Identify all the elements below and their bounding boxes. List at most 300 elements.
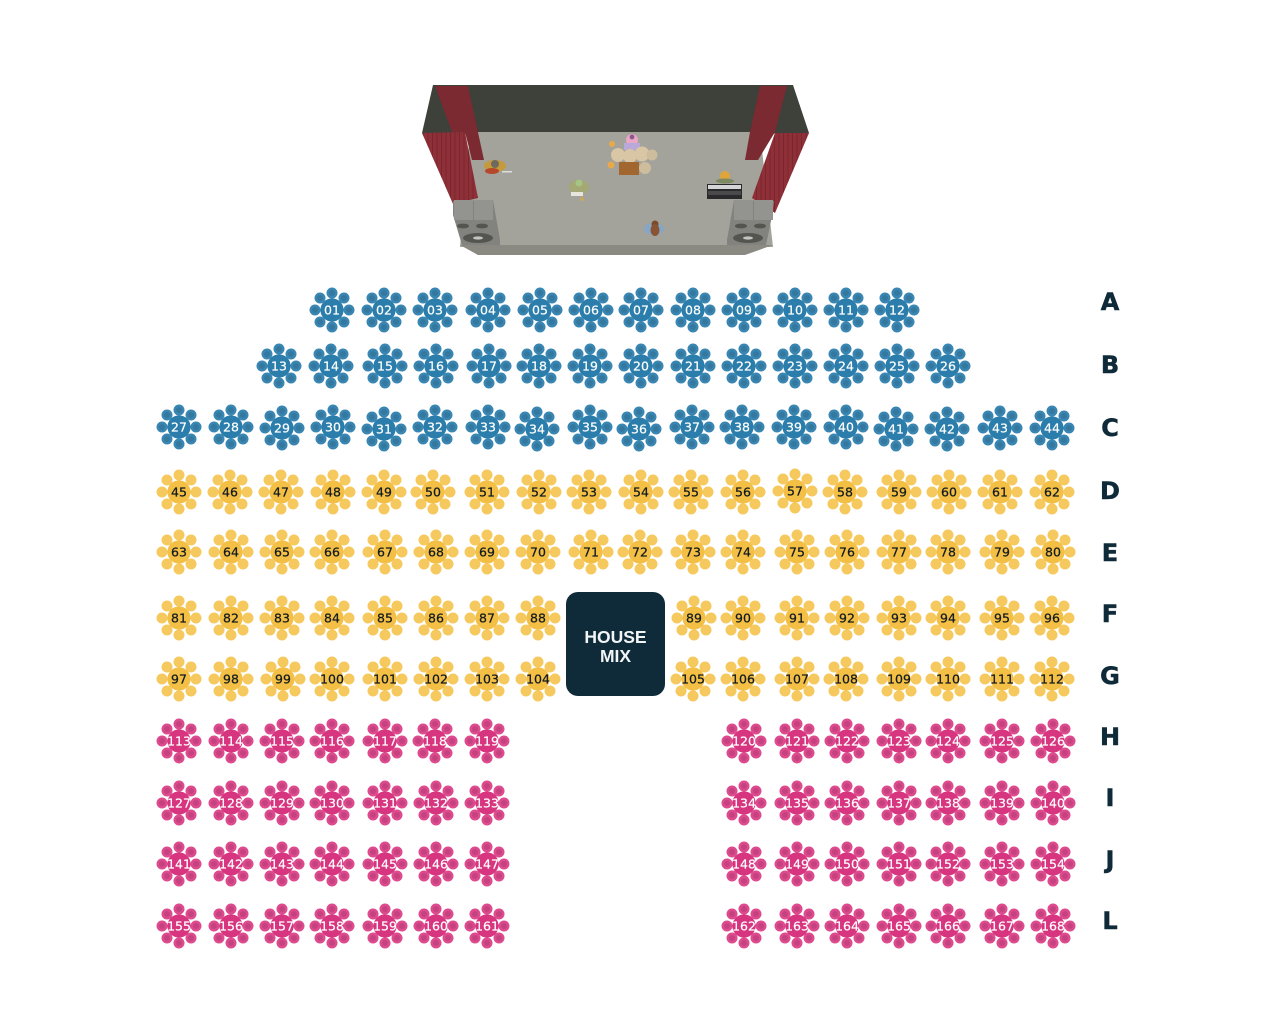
table 73: 73 <box>685 544 701 560</box>
table 47: 47 <box>273 484 289 500</box>
table 41: 41 <box>888 422 904 436</box>
table 160: 160 <box>424 918 448 934</box>
row letter F: F <box>1102 600 1118 628</box>
table 161: 161 <box>475 918 499 934</box>
table 45: 45 <box>171 484 187 500</box>
row G tables <box>156 656 1074 702</box>
table 68: 68 <box>428 544 444 560</box>
table 15: 15 <box>377 358 393 374</box>
table 70 <box>516 530 560 574</box>
table 26 <box>926 344 970 388</box>
table 121: 121 <box>785 734 809 748</box>
table 67 <box>362 530 408 574</box>
table 52 <box>516 470 562 514</box>
table 51: 51 <box>479 484 495 500</box>
right speakers <box>727 200 774 245</box>
table 101 <box>362 656 408 702</box>
table 140 <box>1030 780 1076 826</box>
table 26: 26 <box>940 358 956 374</box>
table 128 <box>208 780 254 826</box>
table 168: 168 <box>1041 918 1065 934</box>
table 21 <box>670 344 716 388</box>
table 82 <box>208 596 254 640</box>
table 153: 153 <box>990 856 1014 872</box>
table 121 <box>774 718 820 764</box>
table 159 <box>362 904 408 948</box>
table 01: 01 <box>324 302 340 318</box>
table 42: 42 <box>939 422 955 436</box>
table 144 <box>310 842 354 886</box>
table 116: 116 <box>320 734 344 748</box>
table 151 <box>876 842 922 886</box>
table 33 <box>466 404 510 450</box>
table 23: 23 <box>787 358 803 374</box>
table 143 <box>260 842 304 886</box>
table 126 <box>1030 718 1076 764</box>
table 94: 94 <box>940 610 956 626</box>
table 91 <box>774 596 820 640</box>
table 77: 77 <box>891 544 907 560</box>
table 17 <box>466 344 512 388</box>
table 30: 30 <box>325 420 341 434</box>
table 128: 128 <box>219 796 243 810</box>
table 67: 67 <box>377 544 393 560</box>
table 79: 79 <box>994 544 1010 560</box>
table 35 <box>568 404 612 450</box>
table 16 <box>414 344 458 388</box>
table 42 <box>924 406 970 452</box>
table 136 <box>824 780 870 826</box>
table 46 <box>208 470 252 514</box>
table 143: 143 <box>270 856 294 872</box>
table 50: 50 <box>425 484 441 500</box>
table 156: 156 <box>219 918 243 934</box>
table 31: 31 <box>376 422 392 436</box>
table 136: 136 <box>835 796 859 810</box>
table 151: 151 <box>887 856 911 872</box>
table 167: 167 <box>990 918 1014 934</box>
table 132 <box>414 780 458 826</box>
table 71: 71 <box>583 544 599 560</box>
table 75 <box>774 530 820 574</box>
table 63: 63 <box>171 544 187 560</box>
table 96: 96 <box>1044 610 1060 626</box>
table 135: 135 <box>785 796 809 810</box>
table 148: 148 <box>732 856 756 872</box>
table 05: 05 <box>532 302 548 318</box>
table 09 <box>722 288 766 332</box>
table 77 <box>876 530 922 574</box>
table 127: 127 <box>167 796 191 810</box>
table 06 <box>568 288 614 332</box>
table 03: 03 <box>427 302 443 318</box>
table 147 <box>464 842 510 886</box>
table 61: 61 <box>992 484 1008 500</box>
table 98: 98 <box>223 672 239 686</box>
table 72 <box>618 530 662 574</box>
table 118: 118 <box>423 734 447 748</box>
table 127 <box>156 780 202 826</box>
table 114: 114 <box>219 734 243 748</box>
keyboard player <box>707 171 742 199</box>
row letters <box>1100 288 1120 935</box>
table 57 <box>772 468 818 514</box>
table 25 <box>874 344 920 388</box>
table 152: 152 <box>936 856 960 872</box>
table 60 <box>926 470 972 514</box>
drum kit <box>608 134 658 175</box>
table 142: 142 <box>219 856 243 872</box>
table 36 <box>616 406 662 452</box>
table 159: 159 <box>373 918 397 934</box>
table 68 <box>414 530 458 574</box>
table 111: 111 <box>990 672 1014 686</box>
table 15 <box>362 344 408 388</box>
table 25: 25 <box>889 358 905 374</box>
table 92 <box>824 596 870 640</box>
table 158: 158 <box>320 918 344 934</box>
table 131 <box>362 780 408 826</box>
table 88 <box>516 596 560 640</box>
table 110 <box>926 656 970 702</box>
table 59: 59 <box>891 484 907 500</box>
table 123: 123 <box>887 734 911 748</box>
table 146 <box>414 842 458 886</box>
table 74: 74 <box>735 544 751 560</box>
table 117 <box>362 718 408 764</box>
table 48 <box>310 470 356 514</box>
table 08: 08 <box>685 302 701 318</box>
table 39 <box>772 404 816 450</box>
table 91: 91 <box>789 610 805 626</box>
table 93: 93 <box>891 610 907 626</box>
table 35: 35 <box>582 420 598 434</box>
table 161 <box>464 904 510 948</box>
table 120 <box>722 718 766 764</box>
table 93 <box>876 596 922 640</box>
table 01 <box>310 288 354 332</box>
table 33: 33 <box>480 420 496 434</box>
table 147: 147 <box>475 856 499 872</box>
table 142 <box>208 842 254 886</box>
table 132: 132 <box>424 796 448 810</box>
table 104 <box>516 656 560 702</box>
row F tables <box>156 596 1074 640</box>
table 153 <box>980 842 1024 886</box>
table 13: 13 <box>271 358 287 374</box>
table 24 <box>824 344 868 388</box>
table 78: 78 <box>940 544 956 560</box>
table 03 <box>412 288 458 332</box>
table 163: 163 <box>785 918 809 934</box>
table 89: 89 <box>686 610 702 626</box>
table 11: 11 <box>838 302 854 318</box>
stage floor <box>460 132 773 247</box>
table 52: 52 <box>531 484 547 500</box>
table 66 <box>310 530 354 574</box>
row letter A: A <box>1101 288 1120 316</box>
table 129 <box>260 780 304 826</box>
table 123 <box>876 718 922 764</box>
table 16: 16 <box>428 358 444 374</box>
row A tables <box>310 288 920 332</box>
table 140: 140 <box>1041 796 1065 810</box>
table 134 <box>722 780 766 826</box>
table 22 <box>722 344 766 388</box>
table 66: 66 <box>324 544 340 560</box>
table 150: 150 <box>835 856 859 872</box>
table 75: 75 <box>789 544 805 560</box>
table 62: 62 <box>1044 484 1060 500</box>
table 166 <box>926 904 970 948</box>
table 08 <box>670 288 716 332</box>
table 133: 133 <box>475 796 499 810</box>
table 76 <box>824 530 870 574</box>
right curtain top <box>745 86 787 160</box>
table 29 <box>260 406 304 450</box>
table 99: 99 <box>275 672 291 686</box>
table 02: 02 <box>376 302 392 318</box>
table 99 <box>260 656 306 702</box>
table 119: 119 <box>475 734 499 748</box>
table 157 <box>260 904 304 948</box>
table 122 <box>824 718 870 764</box>
table 80 <box>1030 530 1076 574</box>
table 154 <box>1030 842 1076 886</box>
table 103 <box>464 656 510 702</box>
table 32 <box>412 404 458 450</box>
table 139: 139 <box>990 796 1014 810</box>
table 101: 101 <box>373 672 397 686</box>
table 12: 12 <box>889 302 905 318</box>
row letter H: H <box>1100 723 1120 751</box>
guitarist centre <box>569 180 589 201</box>
table 102 <box>414 656 458 702</box>
table 102: 102 <box>424 672 448 686</box>
table 113: 113 <box>167 734 191 748</box>
table 28: 28 <box>223 420 239 434</box>
table 154: 154 <box>1041 856 1065 872</box>
row letter C: C <box>1101 414 1119 442</box>
row letter L: L <box>1102 907 1118 935</box>
table 167 <box>980 904 1024 948</box>
table 69 <box>464 530 510 574</box>
table 12 <box>874 288 920 332</box>
table 43: 43 <box>992 420 1008 436</box>
table 107 <box>774 656 820 702</box>
table 48: 48 <box>325 484 341 500</box>
table 55 <box>668 470 714 514</box>
table 47 <box>258 470 304 514</box>
table 137 <box>876 780 922 826</box>
table 138: 138 <box>936 796 960 810</box>
table 129: 129 <box>270 796 294 810</box>
table 156 <box>208 904 254 948</box>
table 115 <box>260 718 304 764</box>
table 139 <box>980 780 1024 826</box>
table 149: 149 <box>785 856 809 872</box>
table 27 <box>156 404 202 450</box>
table 36: 36 <box>631 422 647 436</box>
table 86: 86 <box>428 610 444 626</box>
table 152 <box>926 842 970 886</box>
table 04: 04 <box>480 302 496 318</box>
table 165: 165 <box>887 918 911 934</box>
table 09: 09 <box>736 302 752 318</box>
table 81 <box>156 596 202 640</box>
table 37: 37 <box>684 420 700 434</box>
table 115: 115 <box>270 734 294 748</box>
table 64 <box>208 530 254 574</box>
table 85: 85 <box>377 610 393 626</box>
table 62 <box>1030 470 1074 514</box>
table 07: 07 <box>633 302 649 318</box>
table 58 <box>822 470 868 514</box>
table 50 <box>410 470 456 514</box>
table 104: 104 <box>526 672 550 686</box>
table 63 <box>156 530 202 574</box>
table 10: 10 <box>787 302 803 318</box>
table 90 <box>720 596 766 640</box>
table 11 <box>824 288 868 332</box>
table 14: 14 <box>323 358 339 374</box>
table 100: 100 <box>320 672 344 686</box>
table 97 <box>156 656 202 702</box>
table 114 <box>208 718 254 764</box>
table 58: 58 <box>837 484 853 500</box>
table 149 <box>774 842 820 886</box>
table 141 <box>156 842 202 886</box>
table 168 <box>1030 904 1076 948</box>
table 18 <box>516 344 562 388</box>
table 146: 146 <box>424 856 448 872</box>
table 107: 107 <box>785 672 809 686</box>
table 119 <box>464 718 510 764</box>
table 162 <box>722 904 766 948</box>
table 162: 162 <box>732 918 756 934</box>
table 106: 106 <box>731 672 755 686</box>
table 13 <box>256 344 302 388</box>
row letter E: E <box>1102 539 1118 567</box>
table 166: 166 <box>936 918 960 934</box>
table 158 <box>310 904 354 948</box>
table 130: 130 <box>320 796 344 810</box>
table 44: 44 <box>1044 420 1060 436</box>
table 71 <box>568 530 614 574</box>
left speakers <box>453 200 500 245</box>
table 41 <box>874 406 918 452</box>
row B tables <box>256 344 970 388</box>
table 30 <box>310 404 356 450</box>
table 07 <box>618 288 664 332</box>
table 141: 141 <box>167 856 191 872</box>
table 54 <box>618 470 664 514</box>
table 46: 46 <box>222 484 238 500</box>
table 84 <box>310 596 354 640</box>
table 124: 124 <box>936 734 960 748</box>
table 34: 34 <box>529 422 545 436</box>
table 103: 103 <box>475 672 499 686</box>
table 122: 122 <box>835 734 859 748</box>
table 105 <box>670 656 716 702</box>
table 18: 18 <box>531 358 547 374</box>
table 73 <box>670 530 716 574</box>
singer <box>644 220 664 236</box>
table 92: 92 <box>839 610 855 626</box>
table 29: 29 <box>274 420 290 436</box>
left curtain top <box>435 86 484 160</box>
table 130 <box>310 780 354 826</box>
house mix booth <box>566 592 665 696</box>
table 134: 134 <box>732 796 756 810</box>
table 94 <box>926 596 970 640</box>
table 10 <box>772 288 818 332</box>
table 17: 17 <box>481 358 497 374</box>
table 19 <box>568 344 612 388</box>
stage front lip <box>460 245 773 255</box>
table 21: 21 <box>685 358 701 374</box>
table 43 <box>978 406 1022 450</box>
left curtain side <box>422 132 478 204</box>
row I tables <box>156 780 1076 826</box>
table 138 <box>926 780 970 826</box>
table 40 <box>824 404 868 450</box>
table 56 <box>720 470 766 514</box>
table 144: 144 <box>320 856 344 872</box>
table 131: 131 <box>373 796 397 810</box>
table 157: 157 <box>270 918 294 934</box>
table 135 <box>774 780 820 826</box>
table 20: 20 <box>633 358 649 374</box>
table 165 <box>876 904 922 948</box>
table 109: 109 <box>887 672 911 686</box>
table 31 <box>362 406 406 452</box>
table 126: 126 <box>1041 734 1065 748</box>
right curtain side <box>752 133 809 213</box>
row L tables <box>156 904 1076 948</box>
table 164: 164 <box>835 918 859 934</box>
stage <box>422 85 809 255</box>
table 49: 49 <box>376 484 392 500</box>
table 19: 19 <box>582 358 598 374</box>
guitarist left <box>484 160 512 174</box>
table 118 <box>412 718 458 764</box>
table 14 <box>308 344 354 388</box>
table 70: 70 <box>530 544 546 560</box>
table 06: 06 <box>583 302 599 318</box>
table 78 <box>926 530 970 574</box>
row letter J: J <box>1104 846 1114 874</box>
table 49 <box>362 470 406 514</box>
table 79 <box>980 530 1024 574</box>
table 117: 117 <box>373 734 397 748</box>
table 24: 24 <box>838 358 854 374</box>
table 148 <box>722 842 766 886</box>
house mix booth: MIX <box>600 646 631 666</box>
table 05 <box>518 288 562 332</box>
table 164 <box>824 904 870 948</box>
table 76: 76 <box>839 544 855 560</box>
table 55: 55 <box>683 484 699 500</box>
table 109 <box>876 656 922 702</box>
table 95 <box>980 596 1024 640</box>
table 02 <box>362 288 406 332</box>
table 64: 64 <box>223 544 239 560</box>
back wall <box>422 85 809 134</box>
table 27: 27 <box>171 420 187 434</box>
table 44 <box>1030 406 1074 450</box>
row E tables <box>156 530 1076 574</box>
